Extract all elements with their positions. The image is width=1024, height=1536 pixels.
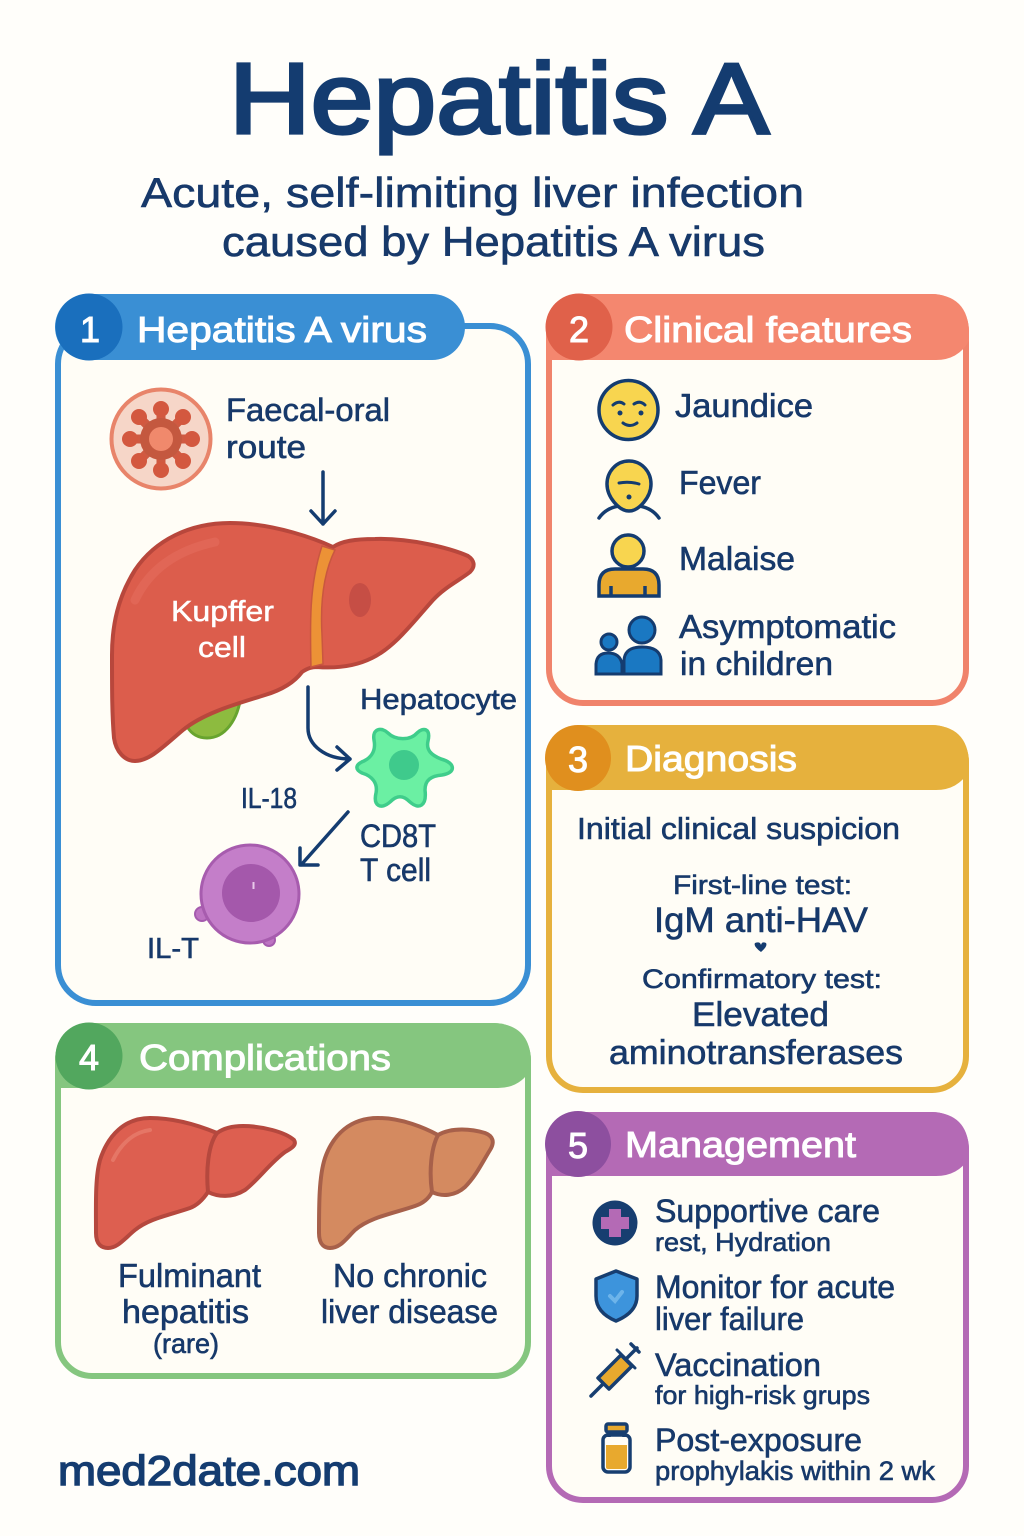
panel 2: Clinical features bbox=[546, 294, 969, 703]
icon: T cell bbox=[195, 845, 299, 946]
panel 4 header: 4 bbox=[79, 1037, 99, 1078]
label: fulminant hepatitis bbox=[118, 1257, 261, 1359]
text: confirmatory test: Elevated bbox=[692, 996, 829, 1034]
text: confirmatory test bbox=[609, 964, 903, 1072]
text: confirmatory test: aminotransferases bbox=[609, 1034, 903, 1072]
icon: red liver bbox=[96, 1118, 295, 1248]
panel 4: Complications bbox=[55, 1022, 531, 1376]
panel 3 header: 3 bbox=[568, 739, 588, 780]
panel 5 header bbox=[545, 1111, 969, 1177]
icon: liver with Kupffer cell: cell bbox=[198, 632, 246, 664]
text: initial clinical suspicion: Initial clinical suspicion bbox=[577, 811, 900, 846]
label: asymptomatic in children bbox=[679, 608, 896, 682]
icon: malaise person bbox=[599, 535, 659, 596]
text: monitor for acute liver failure: Monitor for acute bbox=[655, 1269, 895, 1305]
arrow: liver to hepatocyte bbox=[308, 687, 350, 770]
icon: virus bbox=[112, 390, 210, 488]
panel 2 header: Clinical features bbox=[624, 309, 912, 350]
label: jaundice: Jaundice bbox=[675, 387, 813, 424]
panel 1: Hepatitis A virus bbox=[55, 294, 528, 1003]
icon: fever person bbox=[599, 461, 659, 518]
label: IL-T: IL-T bbox=[147, 933, 199, 965]
subtitle: Acute, self-limiting liver infection bbox=[141, 169, 804, 216]
text: first-line test: IgM anti-HAV bbox=[654, 901, 869, 940]
label: IL-18: IL-18 bbox=[241, 783, 297, 815]
text: confirmatory test: Confirmatory test: bbox=[642, 964, 882, 994]
panel 4 header: Complications bbox=[139, 1037, 391, 1078]
label: faecal-oral route: Faecal-oral bbox=[226, 392, 390, 428]
text: vaccination: for high-risk grups bbox=[655, 1380, 870, 1410]
label: fever: Fever bbox=[679, 464, 761, 501]
panel 5 header: Management bbox=[625, 1124, 856, 1165]
footer: website: med2date.com bbox=[58, 1447, 360, 1494]
text: monitor for acute liver failure bbox=[655, 1269, 895, 1337]
text: vaccination bbox=[655, 1347, 870, 1410]
icon: children bbox=[596, 617, 661, 674]
label: no chronic liver disease: No chronic bbox=[333, 1257, 487, 1294]
panel 5: Management bbox=[545, 1111, 969, 1500]
icon: vial bbox=[603, 1424, 630, 1472]
arrow: hepatocyte to T cell bbox=[300, 812, 348, 865]
label: faecal-oral route bbox=[226, 392, 390, 465]
icon: liver with Kupffer cell: Kupffer bbox=[171, 596, 274, 628]
icon: liver with Kupffer cell bbox=[112, 523, 474, 761]
icon: healthy brown liver bbox=[319, 1118, 493, 1248]
icon: medical cross bbox=[592, 1200, 638, 1246]
icon: small down marker bbox=[755, 942, 766, 952]
panel 3 header: Diagnosis bbox=[625, 738, 797, 779]
panel 1 header: Hepatitis A virus bbox=[137, 309, 427, 350]
icon: jaundice face bbox=[599, 380, 658, 440]
label: CD8T T cell: CD8T bbox=[360, 818, 436, 854]
text: post-exposure prophylaxis bbox=[655, 1422, 935, 1486]
panel 1 header bbox=[55, 294, 465, 360]
label: no chronic liver disease bbox=[321, 1257, 498, 1330]
panel 2 header: 2 bbox=[569, 309, 589, 350]
label: fulminant hepatitis: (rare) bbox=[153, 1328, 219, 1359]
text: supportive care bbox=[655, 1193, 880, 1257]
label: CD8T T cell bbox=[360, 818, 436, 888]
arrow: route to liver bbox=[311, 472, 335, 524]
title: Hepatitis A bbox=[229, 43, 769, 155]
panel 5 header: 5 bbox=[568, 1125, 588, 1166]
label: asymptomatic in children: in children bbox=[680, 645, 833, 682]
label: CD8T T cell: T cell bbox=[360, 852, 431, 888]
subtitle: caused by Hepatitis A virus bbox=[222, 218, 765, 265]
label: faecal-oral route: route bbox=[226, 429, 306, 465]
label: fulminant hepatitis: hepatitis bbox=[122, 1293, 249, 1330]
text: post-exposure prophylaxis: Post-exposure bbox=[655, 1422, 862, 1458]
panel 1 header: 1 bbox=[80, 309, 100, 350]
icon: shield bbox=[596, 1271, 637, 1321]
label: malaise: Malaise bbox=[679, 540, 795, 577]
panel 2 header bbox=[546, 294, 969, 360]
text: first-line test bbox=[654, 870, 869, 940]
text: vaccination: Vaccination bbox=[655, 1347, 821, 1383]
label: asymptomatic in children: Asymptomatic bbox=[679, 608, 896, 645]
panel 3 header bbox=[545, 725, 969, 791]
label: no chronic liver disease: liver disease bbox=[321, 1293, 498, 1330]
panel 3: Diagnosis bbox=[545, 725, 969, 1090]
icon: syringe bbox=[591, 1344, 639, 1396]
text: supportive care: rest, Hydration bbox=[655, 1227, 831, 1257]
text: monitor for acute liver failure: liver failure bbox=[655, 1301, 804, 1337]
text: post-exposure prophylaxis: prophylakis within 2 wk bbox=[655, 1456, 935, 1486]
panel 4 header bbox=[55, 1022, 531, 1090]
text: supportive care: Supportive care bbox=[655, 1193, 880, 1229]
label: fulminant hepatitis: Fulminant bbox=[118, 1257, 261, 1294]
icon: hepatocyte bbox=[357, 729, 452, 806]
label: hepatocyte: Hepatocyte bbox=[360, 684, 517, 716]
subtitle bbox=[141, 169, 804, 265]
text: first-line test: First-line test: bbox=[673, 870, 852, 900]
